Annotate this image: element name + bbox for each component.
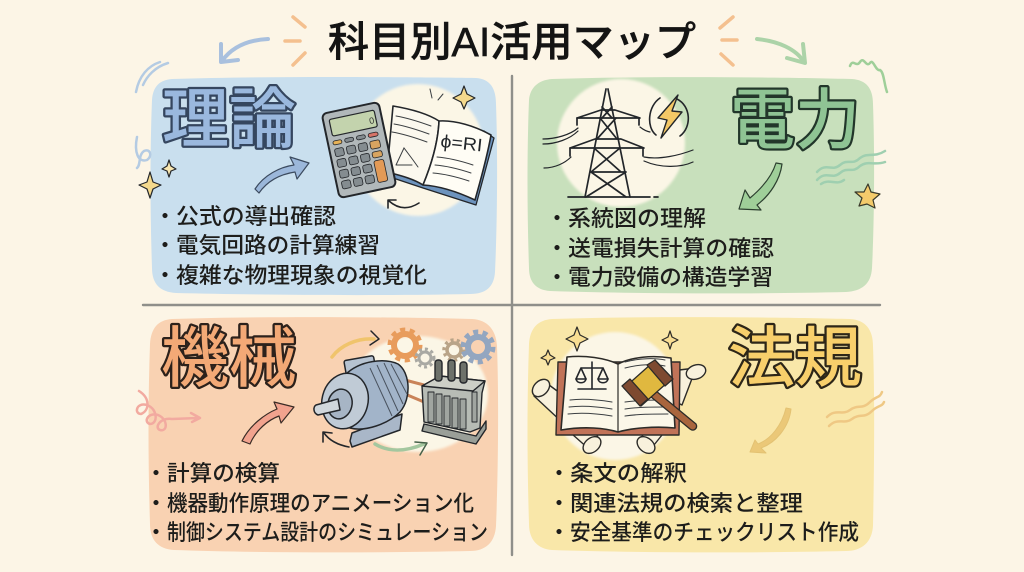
illustration backdrop [557, 79, 685, 207]
heading: 電力 [730, 83, 860, 157]
icon: open law book [556, 356, 680, 435]
list: 電力設備の構造学習 [568, 265, 773, 290]
list: ・ [145, 520, 167, 545]
arrow: large salmon [242, 402, 294, 444]
icon: scales [576, 362, 608, 389]
icon: transmission tower [543, 89, 693, 197]
panel background: green [528, 77, 874, 293]
list: 公式の導出確認 [176, 204, 336, 229]
list: 関連法規の検索と整理 [570, 491, 803, 516]
doodle: top right squiggle [850, 60, 887, 92]
list [546, 206, 774, 290]
list [154, 204, 427, 288]
list: 送電損失計算の確認 [568, 236, 774, 261]
icon: gears [390, 330, 493, 367]
arrow: yellow [750, 408, 791, 453]
icon: open book [387, 106, 494, 205]
arrow: large blue [255, 157, 309, 193]
arrow: yellow curved [332, 331, 379, 357]
doodle: waves [817, 151, 885, 184]
icon: gavel [622, 360, 697, 430]
arrow: small curved [388, 200, 419, 208]
list: 安全基準のチェックリスト作成 [570, 520, 859, 545]
list: ・ [546, 265, 568, 290]
list: ・ [154, 233, 176, 258]
icon: transformer [422, 360, 486, 444]
list: 計算の検算 [167, 461, 280, 486]
doodle: pink squiggle [137, 391, 200, 430]
doodle: yellow waves [827, 392, 884, 426]
panel: 電力 [528, 60, 887, 293]
illustration backdrop [551, 332, 679, 460]
list: 系統図の理解 [568, 206, 706, 231]
list: ・ [548, 491, 570, 516]
dividers [143, 76, 880, 555]
panel background: orange [148, 317, 498, 552]
sparkles [139, 86, 475, 198]
list: 制御システム設計のシミュレーション [167, 520, 488, 545]
list: ・ [546, 236, 568, 261]
arrow: green curved [375, 442, 427, 455]
icon: star [855, 184, 880, 208]
icon: lightning bolt [650, 95, 688, 138]
list: ・ [145, 491, 167, 516]
title: 科目別AI活用マップ [328, 19, 696, 65]
list: 機器動作原理のアニメーション化 [167, 491, 474, 516]
list: 条文の解釈 [570, 461, 687, 486]
list: ・ [548, 520, 570, 545]
list [548, 461, 859, 545]
list: 複雑な物理現象の視覚化 [176, 263, 427, 288]
icon: calculator [322, 102, 396, 198]
decorative title rays, right [720, 17, 737, 65]
doodle: blue swirls left [136, 62, 168, 168]
icon: connecting rods [405, 380, 424, 402]
list: ・ [145, 461, 167, 486]
arrow: small dark [323, 432, 349, 447]
list: 電気回路の計算練習 [176, 233, 380, 258]
illustration backdrop [352, 84, 484, 216]
panel background: blue [150, 77, 497, 295]
arrow: green [739, 163, 782, 210]
list: ・ [548, 461, 570, 486]
list: ・ [546, 206, 568, 231]
list: ・ [154, 204, 176, 229]
arrow: top left blue [221, 39, 268, 62]
icon: calculator: 0 [368, 115, 375, 126]
formula: ϕ=RI [440, 131, 483, 155]
panel: 理論 [139, 77, 497, 295]
panel background: yellow [528, 317, 874, 552]
decorative title rays, left [285, 17, 305, 65]
icon: scrolls [529, 362, 708, 457]
list: ・ [154, 263, 176, 288]
sparkles [541, 327, 678, 365]
marks above book [430, 89, 443, 100]
list [145, 461, 488, 545]
heading: 機械 [161, 321, 297, 395]
panel: 機械 [137, 317, 498, 552]
heading: 理論 [162, 82, 296, 156]
icon: motor [314, 356, 408, 447]
illustration backdrop [348, 336, 488, 452]
arrow: top right green [757, 39, 805, 63]
panel: 法規 [528, 317, 884, 552]
heading: 法規 [728, 321, 862, 395]
